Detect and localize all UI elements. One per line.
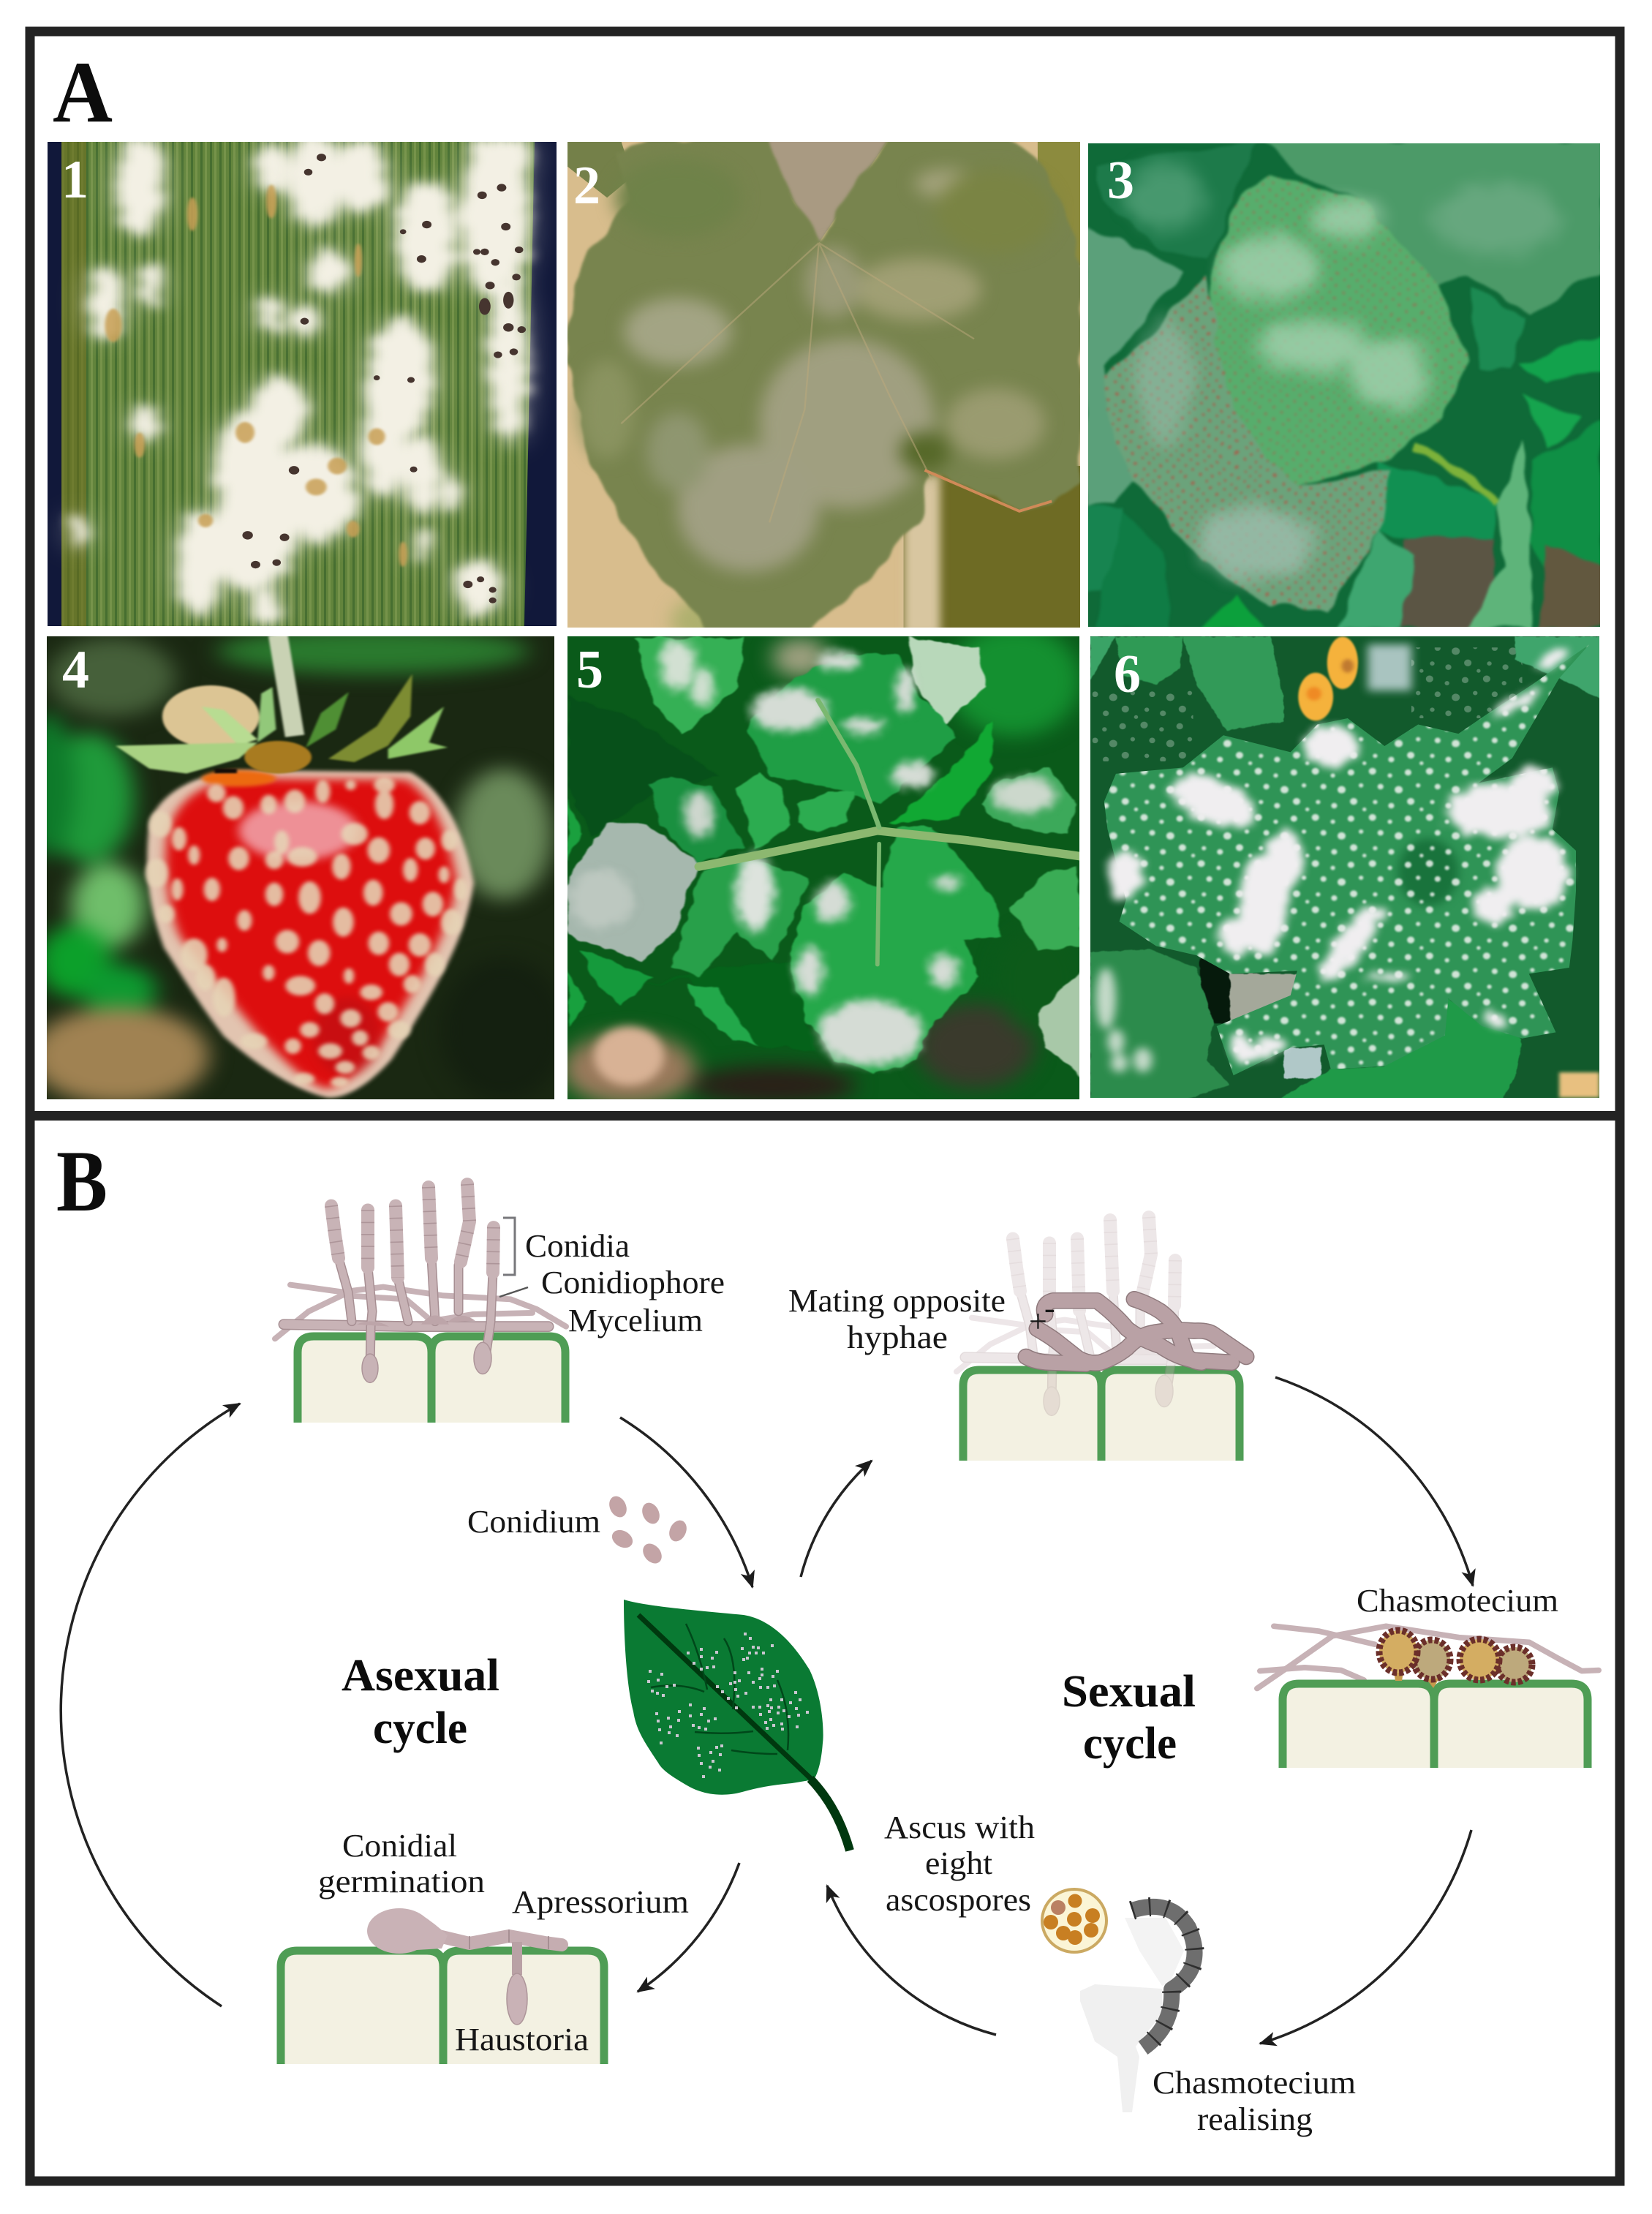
label ascospores: ascospores [886,1882,1031,1918]
leader line to conidiophore [499,1287,528,1297]
hyphae strands [1257,1626,1599,1688]
heading: sexual cycle: cycle [1083,1719,1177,1769]
arrow: release to leaf [827,1886,996,2035]
label germination: germination [318,1864,485,1899]
number 3: 3 [1107,151,1134,211]
host cells [963,1370,1240,1461]
photo 6: squash leaf with white spots [1090,636,1599,1098]
host cells [1283,1684,1588,1768]
cycle arrows [61,1377,1473,2044]
chasmothecia [1379,1630,1532,1688]
number 4: 4 [62,640,89,700]
label hyphae: hyphae [847,1319,948,1355]
bracket for conidia [503,1218,515,1275]
label apressorium: Apressorium [512,1884,689,1920]
heading: asexual cycle [342,1651,499,1753]
label chasmotecium: Chasmotecium [1153,2065,1356,2101]
number 2: 2 [573,156,600,216]
number 1: 1 [61,150,88,210]
conidium spores group [467,1494,690,1567]
photo 2: grape leaf with grey powdery coating [567,142,1080,628]
heading: asexual cycle: Asexual [342,1651,499,1701]
label conidia: Conidia [525,1228,630,1264]
host epidermal cells [298,1336,565,1423]
spore cluster [606,1494,690,1567]
stage: conidiophores on host cells [275,1184,725,1423]
host cells [281,1951,604,2064]
mating hyphae [1026,1299,1246,1364]
heading: sexual cycle [1062,1667,1196,1769]
label haustoria: Haustoria [455,2022,589,2057]
minus sign: - [1044,1290,1055,1326]
label eight: eight [925,1845,992,1881]
arrow: leaf to germination [638,1863,739,1992]
plus sign: + [1029,1303,1047,1339]
label mating opposite: Mating opposite [788,1283,1006,1319]
faded conidiophores [957,1217,1248,1415]
heading: sexual cycle: Sexual [1062,1667,1196,1717]
arrow: chasmothecium to release [1260,1830,1471,2044]
stage: mating opposite hyphae [788,1217,1248,1461]
panel B letter: B [56,1132,108,1230]
label realising: realising [1197,2101,1313,2137]
arrow: germination back to conidiophores [61,1404,240,2006]
stage: chasmothecium formation [1257,1583,1599,1768]
panel B: powdery mildew life cycle [56,1132,1599,2137]
mildew spots [647,1633,809,1778]
panel A letter: A [53,43,113,140]
label conidial: Conidial [342,1828,457,1864]
panel A: photographs of powdery mildew on host plants [23,43,1609,1112]
conidiophores and mycelium [275,1184,566,1382]
number 5: 5 [576,640,603,700]
label conidiophore: Conidiophore [541,1265,725,1300]
germinating conidium [367,1908,562,2025]
photo 4: strawberry with mildew [47,636,554,1099]
label ascus with: Ascus with [884,1810,1035,1845]
stage: conidial germination [281,1828,689,2064]
ascus with eight ascospores [1042,1889,1106,1952]
opened chasmothecium [1080,1907,1195,2112]
photo 3: soybean leaves with rust specks and mildew [1088,143,1600,627]
central infected leaf [624,1600,850,1850]
number 6: 6 [1114,644,1141,704]
leaf blade [624,1600,823,1795]
photo 5: tomato leaves with mildew [567,636,1079,1099]
label conidium: Conidium [467,1504,600,1540]
side veins [651,1624,788,1754]
arrow: leaf to mating hyphae [801,1461,872,1577]
midrib and stalk [638,1615,850,1850]
label mycelium: Mycelium [568,1303,703,1338]
arrow: conidiophores to leaf [620,1417,753,1587]
photo 1: cereal leaf with white colonies [48,142,557,626]
arrow: mating hyphae to chasmothecium [1275,1377,1473,1586]
label chasmotecium: Chasmotecium [1357,1583,1558,1619]
stage: ascus and opened chasmothecium [884,1810,1356,2137]
heading: asexual cycle: cycle [373,1703,467,1753]
